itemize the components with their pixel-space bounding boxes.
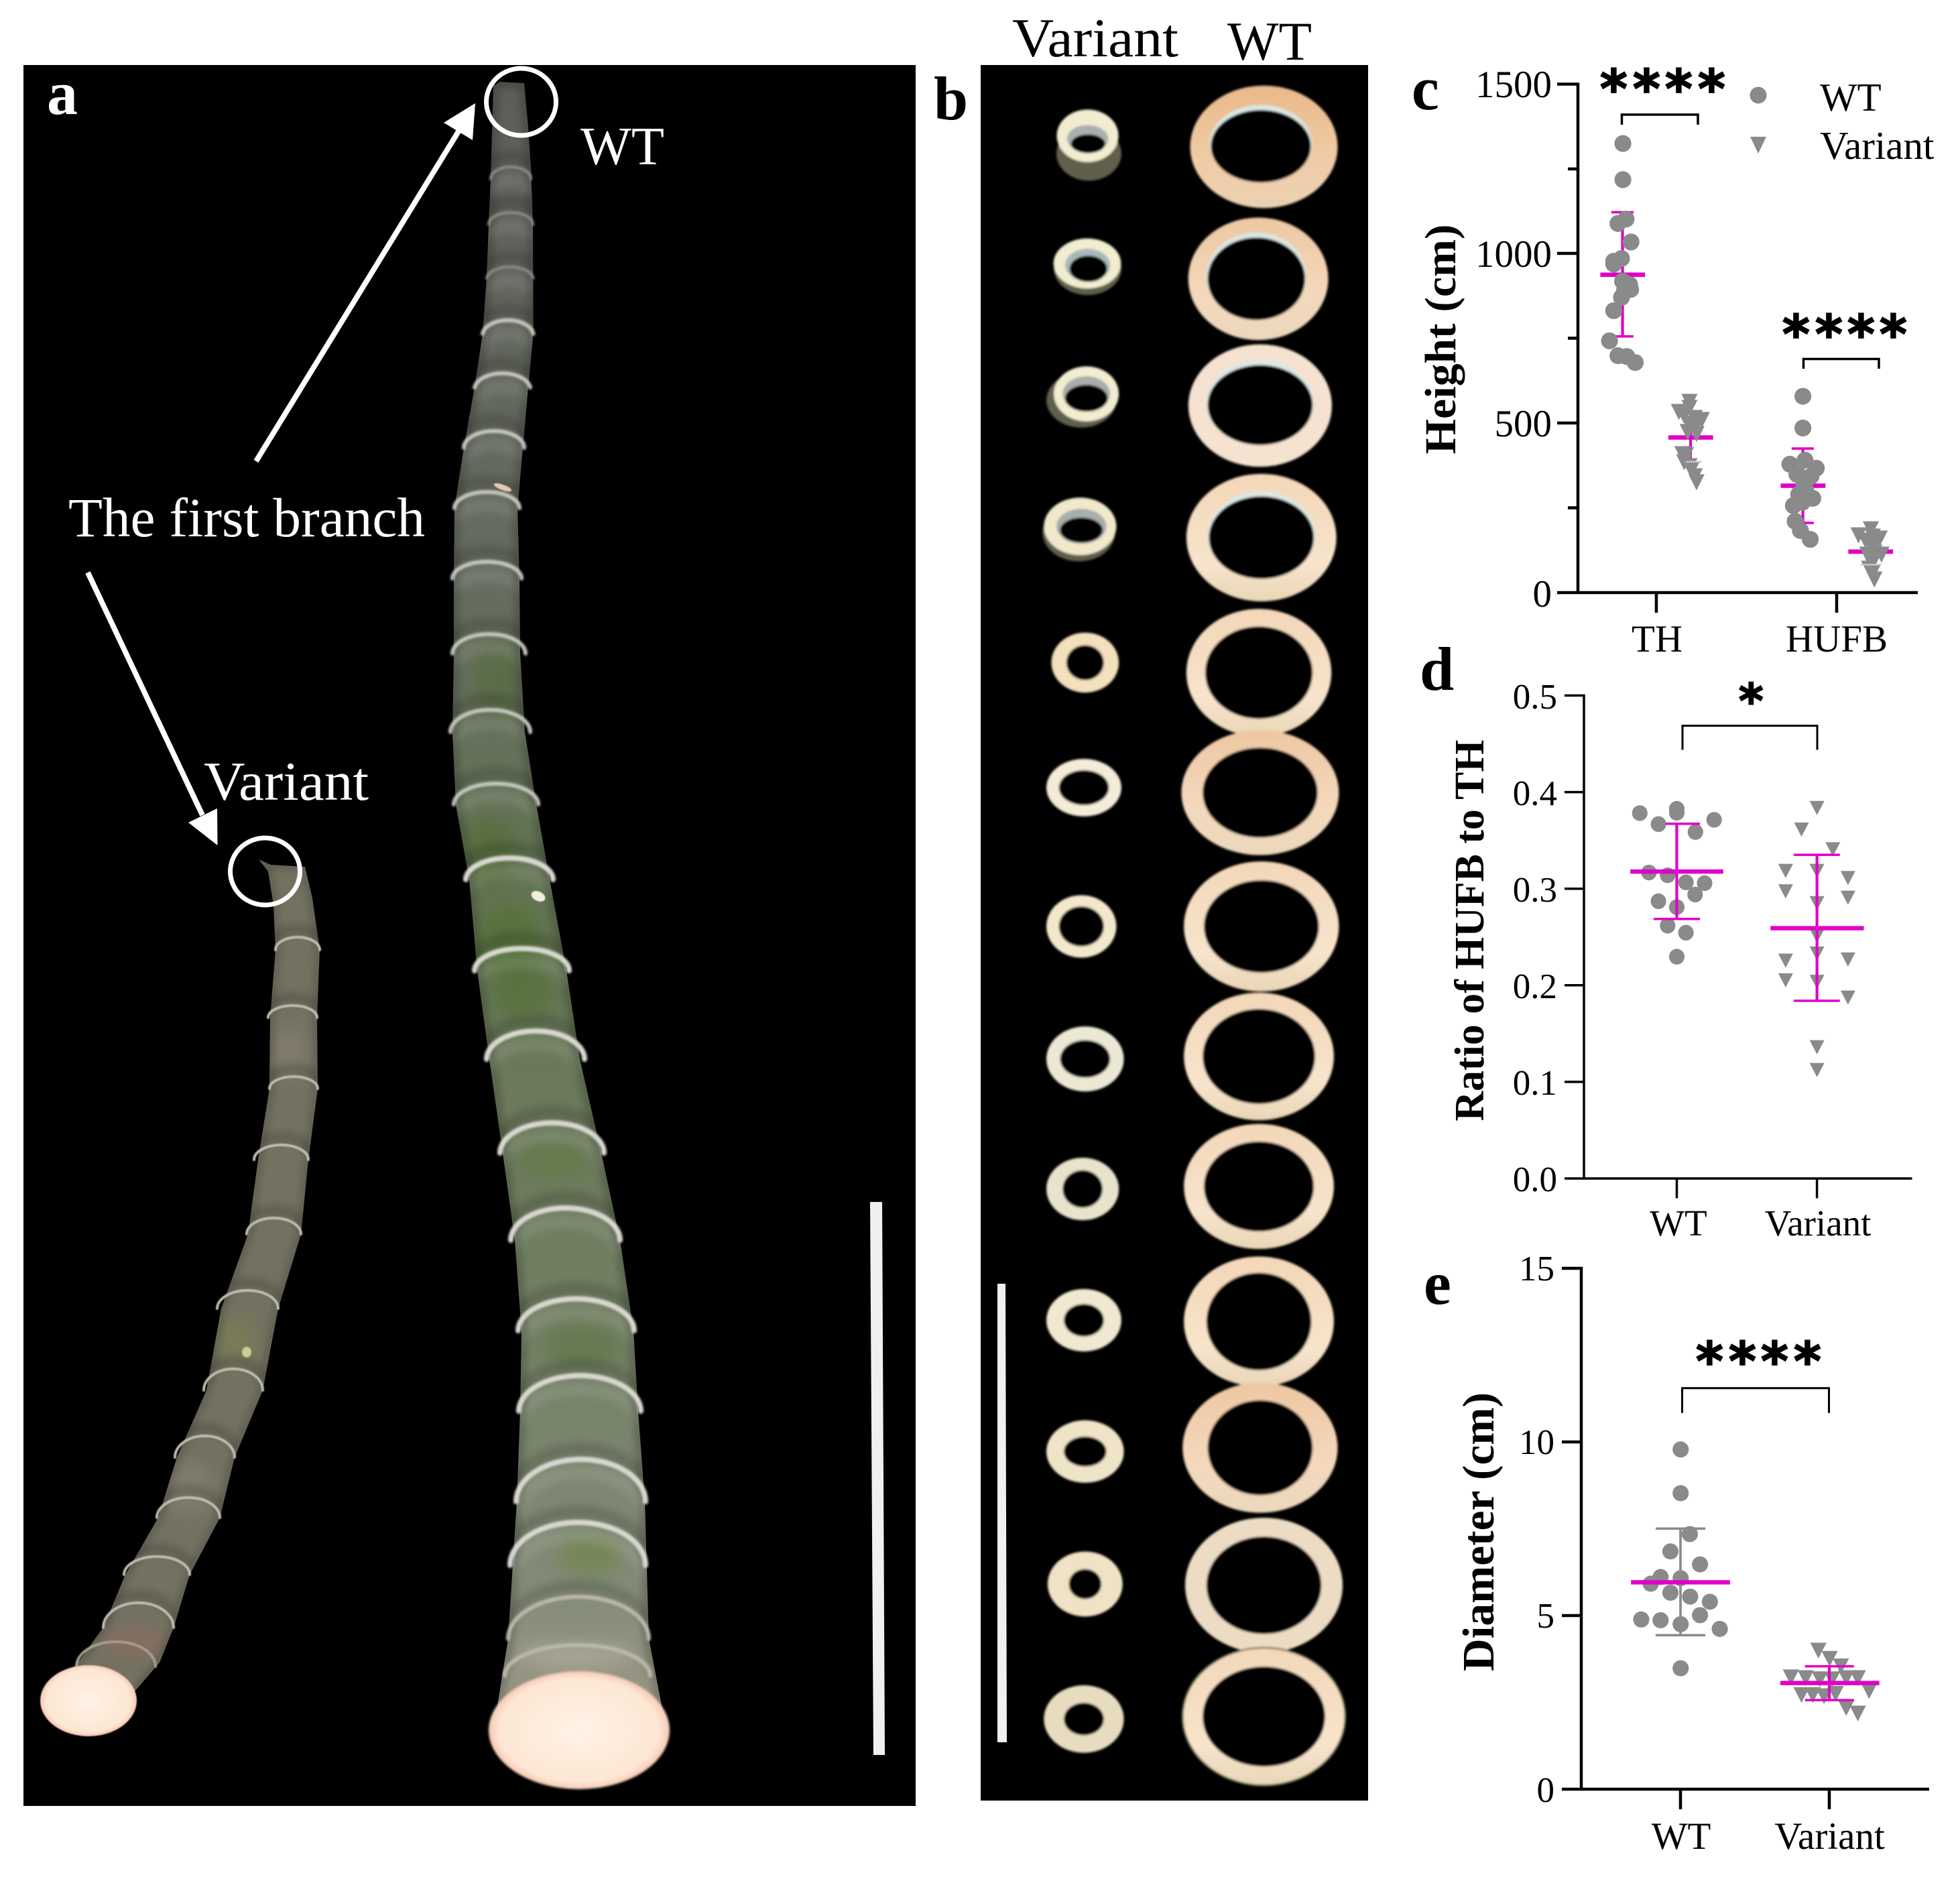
panel letter a: a bbox=[47, 59, 78, 127]
axes and ticks bbox=[1565, 696, 1912, 1199]
axes and ticks bbox=[1562, 1268, 1929, 1809]
panel a: whole plant photo bbox=[23, 59, 916, 1806]
y tick labels: 0.5 bbox=[1513, 678, 1557, 717]
significance: **** bbox=[1696, 1332, 1821, 1392]
WT culm spots bbox=[530, 889, 547, 904]
y tick labels bbox=[1513, 678, 1557, 1199]
significance TH: **** bbox=[1600, 60, 1725, 120]
WT rings bbox=[1181, 86, 1345, 1785]
WT culm bbox=[442, 74, 677, 1789]
x labels: TH bbox=[1632, 618, 1682, 660]
y tick labels: 0 bbox=[1536, 1771, 1554, 1810]
significance HUFB: **** bbox=[1782, 305, 1907, 365]
variant rings bbox=[1042, 109, 1124, 1753]
y axis title: Diameter (cm) bbox=[1454, 1392, 1504, 1671]
Variant cut face bbox=[40, 1665, 137, 1736]
y tick labels bbox=[1475, 64, 1552, 615]
y tick labels: 10 bbox=[1519, 1423, 1554, 1462]
y tick labels: 5 bbox=[1536, 1597, 1554, 1636]
label: The first branch: The first branch bbox=[68, 487, 425, 548]
panel letter e: e bbox=[1424, 1249, 1451, 1317]
significance: * bbox=[1739, 674, 1764, 729]
y tick labels bbox=[1519, 1250, 1554, 1810]
x labels bbox=[1650, 1203, 1871, 1244]
y axis title: Ratio of HUFB to TH bbox=[1447, 740, 1493, 1121]
x labels: HUFB bbox=[1786, 618, 1888, 660]
circle: WT first branch bbox=[487, 68, 556, 135]
scale bar b bbox=[997, 1284, 1007, 1742]
x labels bbox=[1652, 1815, 1885, 1858]
axes and ticks bbox=[1557, 83, 1918, 613]
label: Variant: Variant bbox=[204, 751, 369, 812]
significance bbox=[1682, 1332, 1829, 1413]
data points and error bars bbox=[1630, 801, 1864, 1077]
Variant culm nodes bbox=[76, 937, 320, 1667]
heading: Variant column: Variant bbox=[1012, 7, 1178, 68]
label: WT: WT bbox=[580, 117, 664, 176]
y tick labels: 0.1 bbox=[1513, 1064, 1557, 1103]
WT culm nodes bbox=[450, 167, 650, 1676]
significance bbox=[1682, 674, 1817, 749]
x labels bbox=[1632, 618, 1888, 660]
Variant culm bbox=[34, 851, 328, 1736]
panel e: diameter chart bbox=[1424, 1249, 1929, 1858]
circle: Variant first branch bbox=[231, 838, 300, 905]
legend: WT bbox=[1820, 75, 1882, 119]
y tick labels: 0.4 bbox=[1513, 774, 1557, 813]
panel letter c: c bbox=[1412, 54, 1439, 123]
y axis title: Height (cm) bbox=[1416, 224, 1465, 455]
data points and error bars bbox=[1631, 1441, 1880, 1721]
y tick labels: 500 bbox=[1495, 403, 1552, 445]
y tick labels: 0.3 bbox=[1513, 871, 1557, 910]
y tick labels: 1500 bbox=[1475, 64, 1552, 106]
x labels: WT bbox=[1652, 1815, 1711, 1858]
y tick labels: 15 bbox=[1519, 1250, 1554, 1288]
WT cut face bbox=[489, 1671, 670, 1789]
heading: WT column: WT bbox=[1227, 11, 1312, 72]
arrow to Variant first branch bbox=[88, 572, 217, 845]
panel letter d: d bbox=[1420, 635, 1454, 703]
x labels: WT bbox=[1650, 1203, 1707, 1244]
data points and error bars bbox=[1600, 135, 1893, 588]
y tick labels: 0.2 bbox=[1513, 967, 1557, 1006]
panel letter b: b bbox=[934, 64, 968, 133]
legend bbox=[1750, 75, 1935, 168]
x labels: Variant bbox=[1774, 1815, 1885, 1858]
panel b: culm cross sections bbox=[981, 65, 1368, 1801]
legend: Variant bbox=[1820, 123, 1935, 168]
y tick labels: 0.0 bbox=[1513, 1160, 1557, 1199]
y tick labels: 1000 bbox=[1475, 233, 1552, 276]
x labels: Variant bbox=[1765, 1203, 1871, 1244]
arrow to WT first branch bbox=[256, 103, 475, 461]
panel c: height chart bbox=[1412, 54, 1935, 660]
scale bar a bbox=[870, 1202, 885, 1755]
y tick labels: 0 bbox=[1532, 573, 1552, 615]
panel d: ratio chart bbox=[1420, 635, 1912, 1244]
